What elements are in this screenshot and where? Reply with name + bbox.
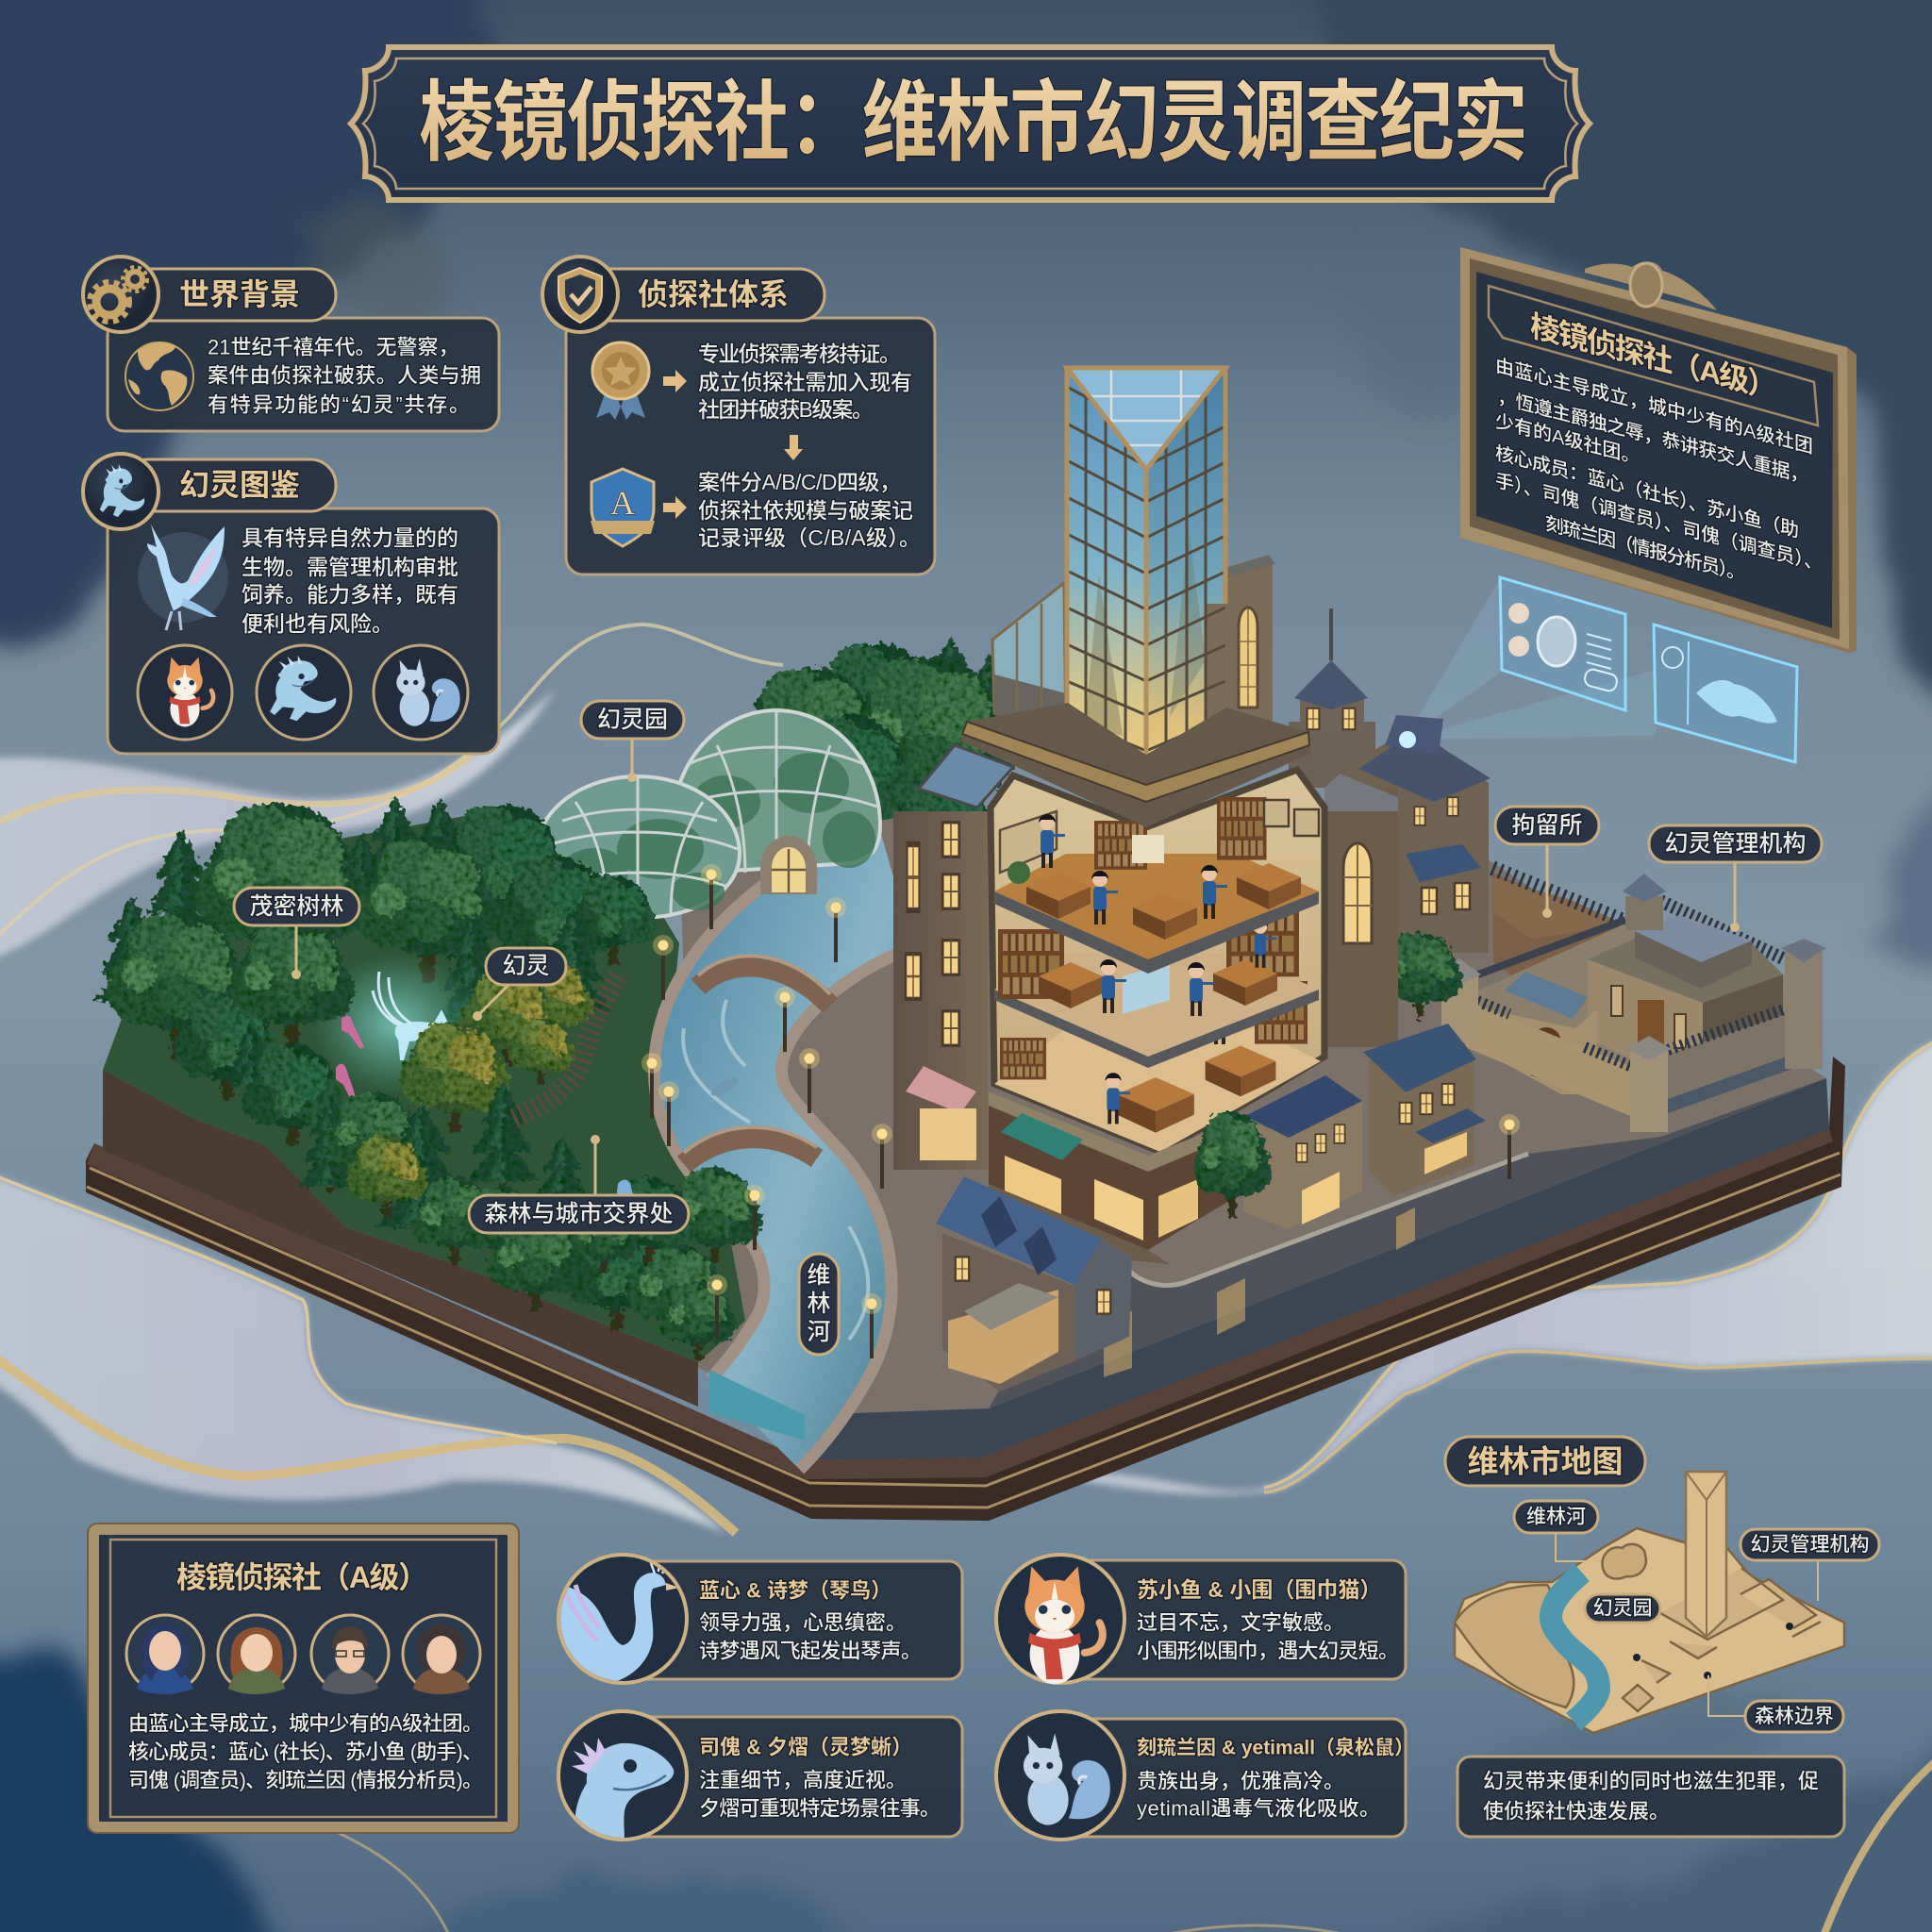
- panel: detective agency system: [542, 257, 935, 575]
- plaque title: 棱镜侦探社（A级）: [1530, 308, 1777, 407]
- main building: ground floor shops: [989, 1091, 1246, 1264]
- body card: [108, 508, 499, 754]
- map label: management bureau: [1740, 1529, 1879, 1601]
- outer walls: [1465, 996, 1800, 1116]
- arrow: down: [784, 435, 803, 460]
- body text: 有特异功能的“幻灵”共存。: [208, 392, 470, 417]
- exposed earth wall: [103, 1070, 698, 1407]
- label: detention center: [1495, 807, 1599, 918]
- character card: Ke Liulanyin and yetimall: [996, 1711, 1414, 1840]
- label: detention center: 拘留所: [1511, 812, 1583, 839]
- portrait: Su Xiaoyu: [218, 1615, 295, 1694]
- street reflections: [1104, 1208, 1415, 1377]
- church tower back: [1289, 608, 1375, 788]
- avatar: dream newt: [558, 1711, 687, 1845]
- text: license: 成立侦探社需加入现有: [698, 370, 912, 394]
- plaque body text: 由蓝心主导成立，城中少有的A级社团: [1495, 355, 1813, 458]
- text: license: 专业侦探需考核持证。: [698, 341, 901, 366]
- forest terrain: [103, 811, 745, 1362]
- character card: Lan Xin and Shimeng: 领导力强，心思缜密。: [699, 1611, 907, 1634]
- panel: detective agency system: 侦探社体系: [638, 277, 789, 311]
- label: dense forest: [234, 888, 359, 979]
- character card: Lan Xin and Shimeng: 蓝心 & 诗梦（琴鸟）: [699, 1579, 891, 1602]
- map label: forest edge: [1708, 1675, 1843, 1732]
- label: ghost management bureau: [1649, 825, 1822, 932]
- house: blue roof right: [1363, 1024, 1486, 1196]
- map buildings: [1623, 1568, 1821, 1711]
- panel: ghost encyclopedia: [83, 454, 499, 754]
- wet street near wall: [989, 1078, 1826, 1408]
- character card: Ke Liulanyin and yetimall: 贵族出身，优雅高冷。: [1137, 1770, 1344, 1792]
- label: ghost management bureau: 幻灵管理机构: [1664, 830, 1807, 857]
- portrait: Ke Liulanyin: [403, 1615, 480, 1694]
- map caption: 幻灵带来便利的同时也滋生犯罪，促: [1483, 1770, 1819, 1792]
- heading pill: [583, 269, 824, 321]
- heading pill: [123, 459, 336, 511]
- avatar: spring squirrel: [996, 1711, 1124, 1840]
- main diorama: city and forest: [86, 358, 1845, 1521]
- decorative silk ribbons: [0, 625, 1932, 1932]
- central hall: [1588, 915, 1783, 1094]
- text: grades: 记录评级（C/B/A级）。: [698, 525, 921, 550]
- label: ghost: 幻灵: [502, 953, 550, 979]
- river: Vilin: [683, 887, 896, 1441]
- label: forest-city boundary: 森林与城市交界处: [484, 1201, 674, 1227]
- wall towers: [1438, 874, 1826, 1132]
- text: license: 社团并破获B级案。: [698, 397, 874, 422]
- ornament: [1585, 261, 1717, 310]
- glass tower with annexes: [992, 358, 1275, 783]
- icon: shield check: [542, 257, 618, 332]
- map tower: [1686, 1472, 1726, 1637]
- map label: ghost garden: 幻灵园: [1592, 1598, 1653, 1619]
- map label: ghost garden: [1585, 1594, 1660, 1623]
- map label: forest edge: 森林边界: [1755, 1706, 1834, 1727]
- body card: [566, 318, 935, 575]
- icon: A shield: [591, 469, 655, 546]
- plaque body text: 刻琉兰因（情报分析员）。: [1545, 512, 1745, 586]
- frame body text: 由蓝心主导成立，城中少有的A级社团。: [128, 1711, 483, 1736]
- portrait: Lan Xin: [126, 1615, 204, 1694]
- base platform: [86, 1057, 1845, 1521]
- title plaque: [351, 47, 1590, 200]
- hologram: profile screen: [1500, 577, 1625, 710]
- character card: Ke Liulanyin and yetimall: yetimall遇毒气液化吸收。: [1137, 1796, 1380, 1821]
- panel: world background: 世界背景: [179, 277, 300, 311]
- stone wall front: [804, 1078, 1829, 1460]
- text: grades: [698, 470, 921, 550]
- back-right building with projector: [1350, 715, 1491, 953]
- character card: Ke Liulanyin and yetimall: 刻琉兰因 & yetimall（泉松鼠）: [1137, 1738, 1414, 1758]
- icon: cat: [138, 645, 232, 740]
- ghost glow clearing: [311, 953, 481, 1094]
- middle floor room: [994, 910, 1319, 1068]
- ghost creature: spirit fox: [373, 972, 447, 1060]
- back trees: [740, 636, 1019, 896]
- panel: world background: [83, 257, 499, 431]
- domes: ghost garden: [536, 710, 880, 918]
- icon: globe: [125, 342, 193, 410]
- plaque body text: 手）、司傀（调查员）、司傀（调查员）、: [1495, 470, 1823, 575]
- body text: [208, 336, 481, 417]
- arrow: medal to text: [663, 370, 687, 392]
- icon: ghost lizard badge: [83, 454, 158, 529]
- detention center yard: [1492, 868, 1625, 991]
- label: forest-city boundary: [469, 1135, 689, 1233]
- character card: Su Xiaoyu and Xiaowei: 小围形似围巾，遇大幻灵短。: [1137, 1640, 1399, 1662]
- glass faces: [1067, 368, 1225, 470]
- hologram beams: [1405, 575, 1656, 740]
- label: Vilin river: 林: [807, 1291, 831, 1317]
- map heading: 维林市地图: [1468, 1443, 1623, 1479]
- compound: ghost management bureau: [1376, 874, 1826, 1132]
- body text: [242, 525, 458, 636]
- text: grades: 侦探社依规模与破案记: [698, 498, 913, 523]
- character card: Si Kui and Xirong: 夕熠可重现特定场景往事。: [699, 1796, 941, 1821]
- map label: management bureau: 幻灵管理机构: [1751, 1534, 1870, 1556]
- body card: [108, 318, 499, 431]
- map caption: 使侦探社快速发展。: [1483, 1800, 1670, 1823]
- character card: Si Kui and Xirong: [558, 1711, 962, 1845]
- frame body text: [128, 1711, 483, 1792]
- hologram: ghost scan screen: [1654, 625, 1797, 762]
- plaque body text: 少有的A级社团。: [1495, 410, 1640, 469]
- panel: ghost encyclopedia: 幻灵图鉴: [179, 468, 300, 502]
- text: grades: 案件分A/B/C/D四级，: [698, 470, 901, 494]
- body text: 便利也有风险。: [242, 611, 393, 636]
- portrait: Si Kui: [311, 1615, 389, 1694]
- plaque body text: ，恆遵主爵独之辱，恭讲获交人重据，: [1497, 386, 1808, 488]
- map label: river: [1514, 1501, 1600, 1561]
- title plaque: 棱镜侦探社：维林市幻灵调查纪实: [419, 75, 1528, 173]
- main building: cutaway interior: [991, 770, 1324, 1152]
- body text: 案件由侦探社破获。人类与拥: [208, 364, 481, 387]
- plaque body text: 核心成员：蓝心（社长）、苏小鱼（助: [1495, 442, 1799, 542]
- main building: right wing: [1324, 774, 1398, 1047]
- bridges: [684, 956, 830, 1164]
- label: ghost garden: 幻灵园: [597, 707, 668, 733]
- plaque body text: [1495, 355, 1823, 606]
- right stone annex: [1207, 555, 1275, 759]
- character card: Lan Xin and Shimeng: 诗梦遇风飞起发出琴声。: [699, 1640, 922, 1662]
- left glass annex: [992, 583, 1066, 745]
- main building: left wing: [893, 745, 1013, 1170]
- roof balustrade band: [960, 703, 1310, 827]
- avatar: scarf cat: [996, 1555, 1124, 1684]
- upper floor room: [994, 797, 1319, 974]
- body text: 具有特异自然力量的的: [242, 525, 458, 550]
- street lamps: [641, 864, 1520, 1358]
- character card: Si Kui and Xirong: 司傀 & 夕熠（灵梦蜥）: [699, 1736, 912, 1758]
- forest: back layer: [94, 797, 657, 1028]
- back walls: [1478, 920, 1625, 974]
- icon: gears: [83, 257, 158, 332]
- front houses: [936, 1024, 1486, 1391]
- forest fence: [514, 972, 621, 1119]
- text: license: [698, 341, 912, 422]
- label: ghost: [473, 948, 566, 1021]
- body text: 生物。需管理机构审批: [242, 555, 458, 579]
- pink awning: [906, 1066, 976, 1113]
- label: Vilin river: 河: [807, 1319, 831, 1345]
- forest: ghost creatures pink: [242, 986, 364, 1104]
- label: Vilin river: 维: [807, 1262, 831, 1289]
- icon: A shield: A: [610, 484, 635, 522]
- icon: medal: [592, 342, 649, 420]
- house: blue roof mid: [1243, 1075, 1362, 1229]
- gatehouse: [1505, 972, 1597, 1094]
- plaque: tilted agency sign: [1460, 247, 1857, 653]
- icon: lizard: [257, 645, 351, 740]
- ground floor room: [994, 981, 1321, 1152]
- small ghost figure: [614, 1180, 639, 1214]
- heading pill: [123, 269, 336, 321]
- label: dense forest: 茂密树林: [249, 893, 344, 920]
- label: Vilin river: [799, 1254, 839, 1355]
- icon: ghost bird: [138, 525, 228, 630]
- frame body text: 司傀 (调查员)、刻琉兰因 (情报分析员)。: [128, 1768, 483, 1792]
- character card: Lan Xin and Shimeng: [558, 1549, 962, 1684]
- map land block: [1455, 1472, 1844, 1733]
- house: front cottage: [936, 1176, 1132, 1391]
- body text: 21世纪千禧年代。无警察，: [208, 336, 458, 358]
- river on map: [1551, 1573, 1599, 1722]
- panel: agency member frame: [88, 1524, 519, 1833]
- body text: 饲养。能力多样，既有: [242, 582, 458, 607]
- frame body text: 核心成员：蓝心 (社长)、苏小鱼 (助手)、: [128, 1740, 483, 1764]
- compound yard: [1465, 915, 1800, 1113]
- character card: Su Xiaoyu and Xiaowei: 苏小鱼 & 小围（围巾猫）: [1137, 1577, 1381, 1602]
- arrow: shield to text: [663, 496, 687, 519]
- character card: Su Xiaoyu and Xiaowei: 过目不忘，文字敏感。: [1137, 1611, 1344, 1634]
- map: Vilin city: [1445, 1437, 1879, 1837]
- character card: Si Kui and Xirong: 注重细节，高度近视。: [699, 1768, 907, 1792]
- label: ghost garden: [581, 701, 684, 782]
- avatar: lyre bird: [558, 1549, 687, 1684]
- map caption: [1457, 1757, 1844, 1837]
- map label: river: 维林河: [1526, 1506, 1586, 1528]
- forest: front layer: [106, 912, 762, 1358]
- character card: Su Xiaoyu and Xiaowei: [996, 1555, 1406, 1684]
- frame title: 棱镜侦探社（A级）: [176, 1560, 428, 1594]
- icon: squirrel: [374, 645, 468, 740]
- map heading: [1445, 1437, 1645, 1486]
- city ground: [679, 811, 1826, 1415]
